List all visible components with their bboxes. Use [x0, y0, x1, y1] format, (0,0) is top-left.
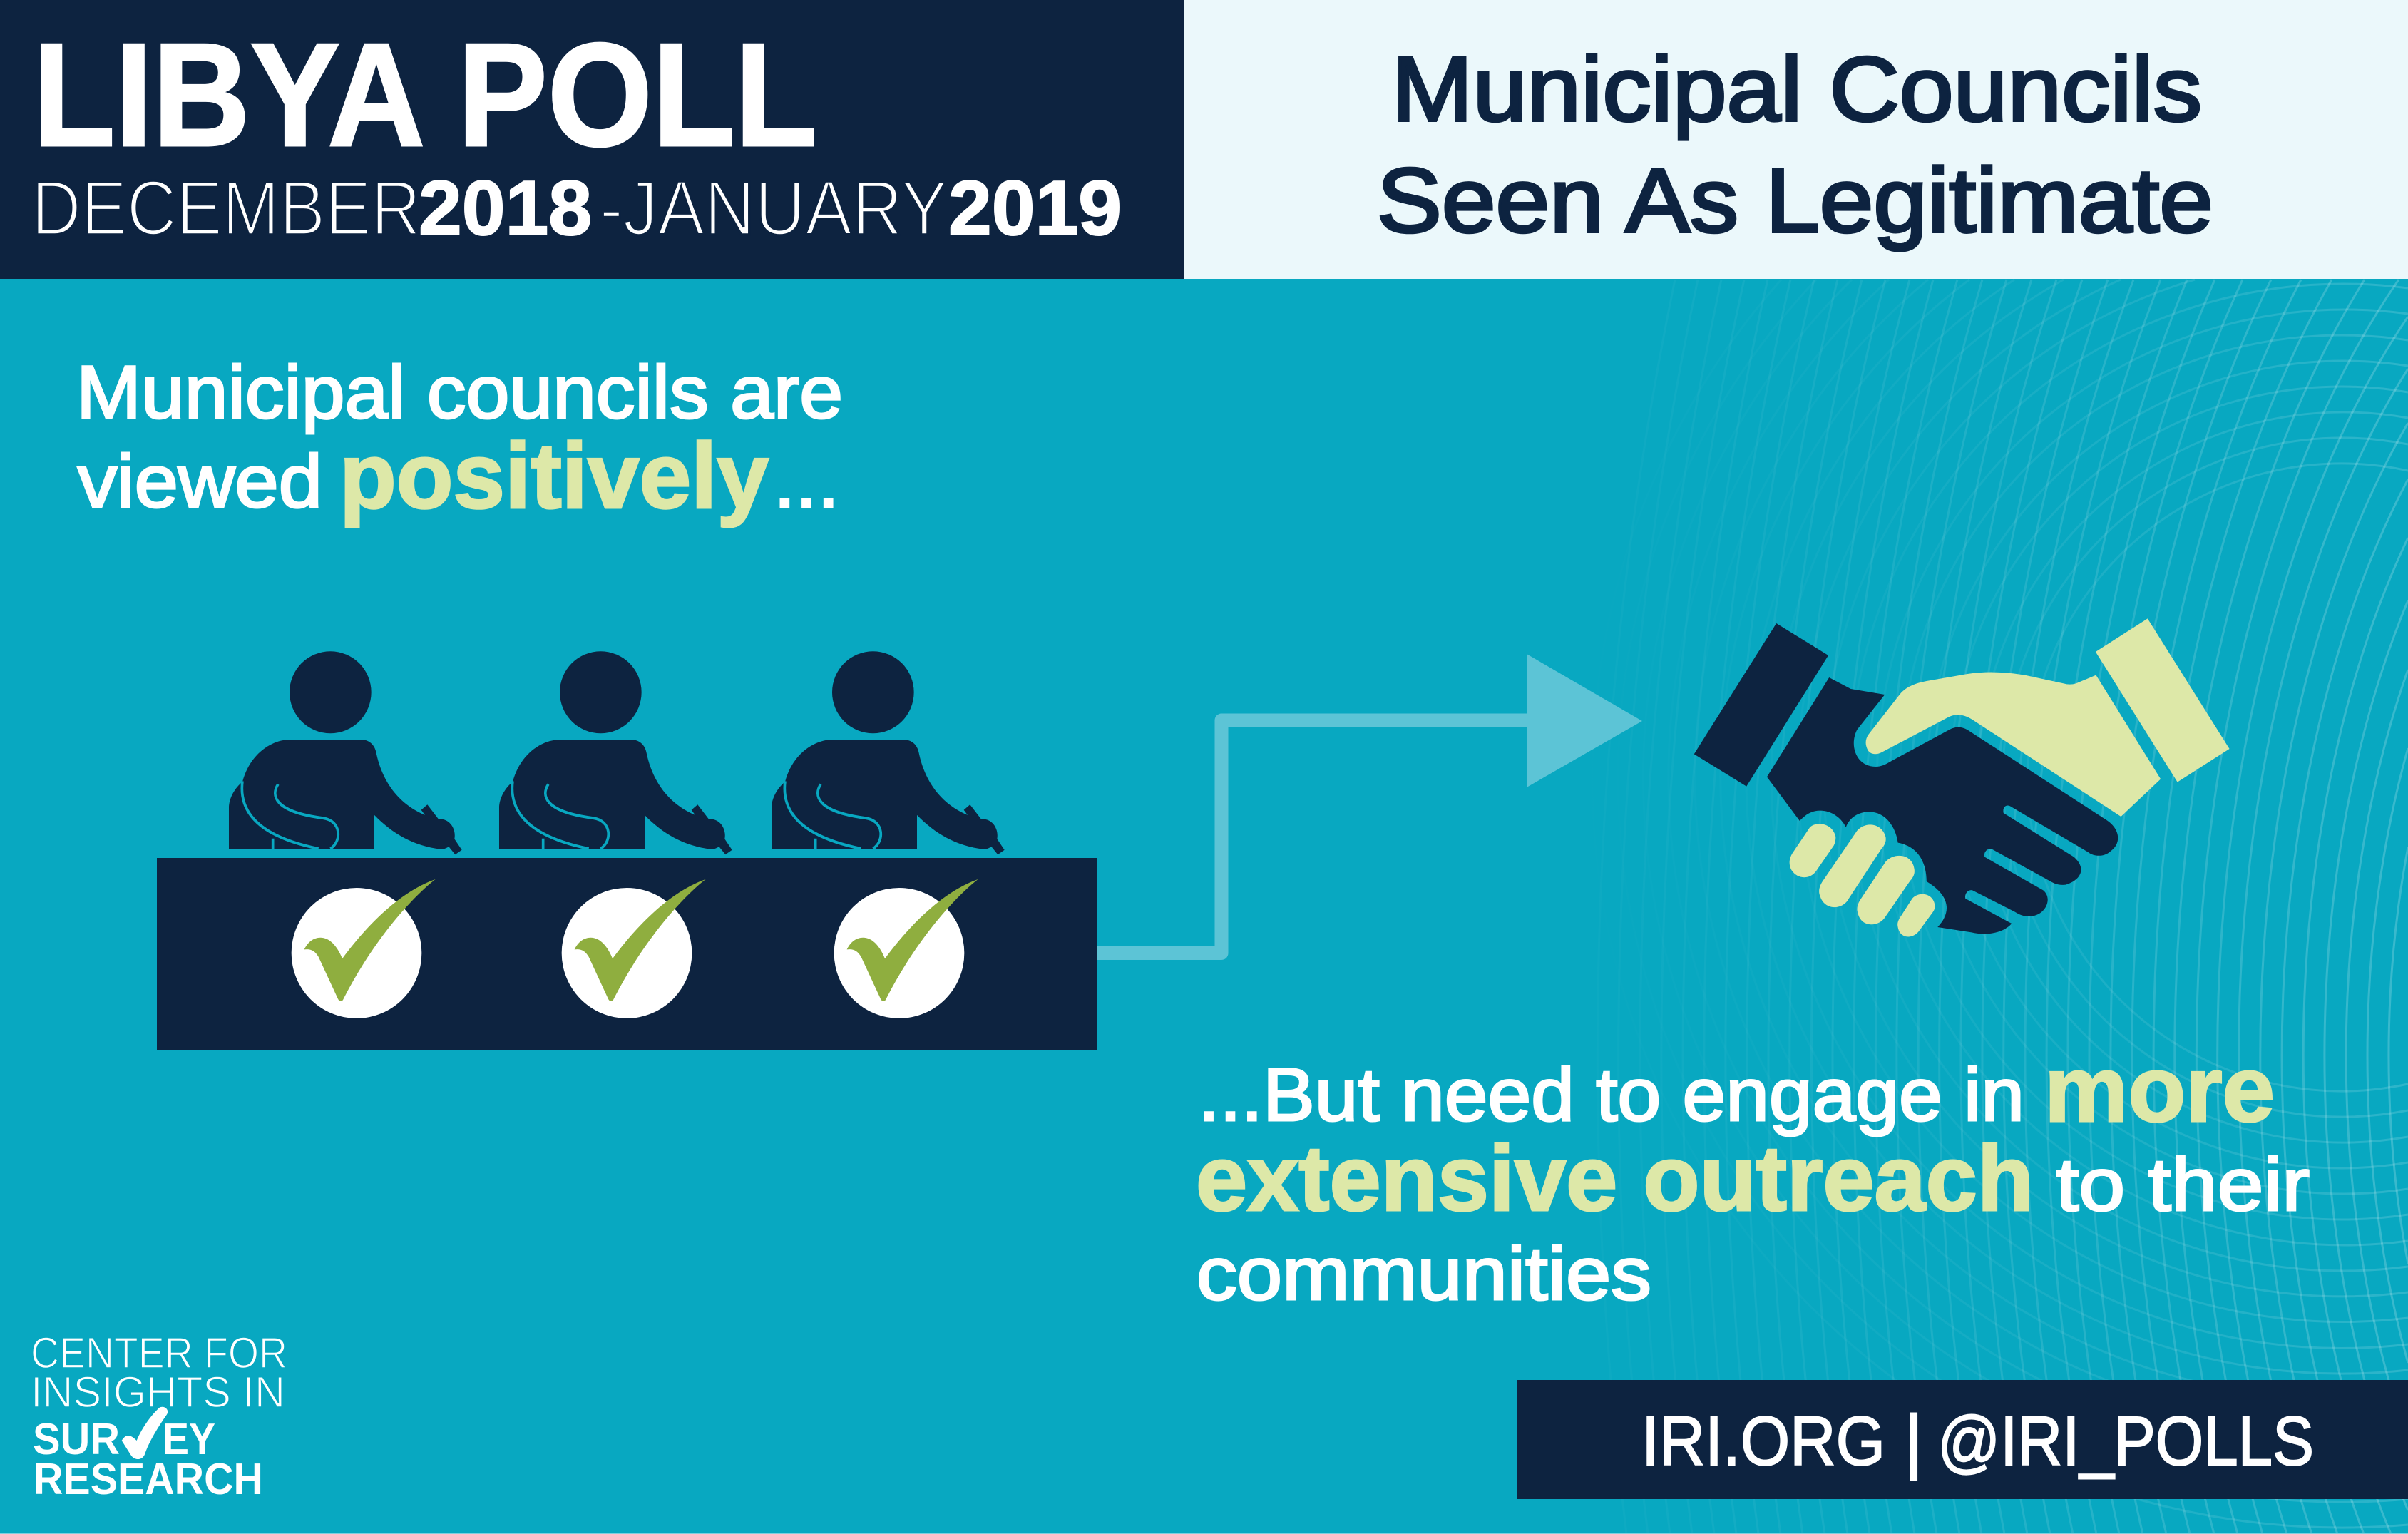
logo: Center for Insights in Survey Research: RESEARCH: [34, 1455, 263, 1504]
footer bar: web and social handle: [1517, 1380, 2408, 1499]
text block: councils viewed positively: Municipal councils are: [76, 351, 843, 434]
council member 3: [772, 651, 1005, 854]
logo: Center for Insights in Survey Research: INSIGHTS IN: [31, 1368, 285, 1416]
text block: need for more extensive outreach: to their: [2056, 1143, 2310, 1227]
table: [157, 858, 1097, 1050]
poll dates: 2019: [948, 165, 1122, 252]
check mark 1: [292, 879, 436, 1018]
council member 1: [229, 651, 462, 854]
check mark 2: [562, 879, 706, 1018]
logo: Center for Insights in Survey Research: EY: [163, 1415, 215, 1464]
footer bar: web and social handle: @IRI_POLLS: [1937, 1402, 2314, 1480]
text block: need for more extensive outreach: more: [2044, 1037, 2275, 1141]
text block: need for more extensive outreach: communities: [1197, 1232, 1651, 1316]
text block: councils viewed positively: ...: [774, 440, 839, 523]
poll dates: -JANUARY: [600, 165, 948, 252]
text block: need for more extensive outreach: [1196, 1037, 2310, 1316]
heading: Municipal Councils Seen As Legitimate: Municipal Councils: [1392, 39, 2202, 140]
logo: Center for Insights in Survey Research: [31, 1329, 287, 1504]
poll dates: DECEMBER: [31, 165, 421, 252]
footer bar: web and social handle: |: [1905, 1401, 1923, 1481]
text block: need for more extensive outreach: extensive outreach: [1196, 1126, 2034, 1230]
poll dates: [31, 165, 1122, 252]
check mark 3: [834, 879, 978, 1018]
arrow: from council to handshake: [1097, 654, 1642, 953]
header panel: topic: [1184, 0, 2408, 279]
heading: LIBYA POLL: LIBYA POLL: [33, 13, 817, 177]
text block: councils viewed positively: viewed: [78, 440, 322, 523]
footer bar: web and social handle: IRI.ORG: [1641, 1402, 1885, 1480]
icon: council members seated at table: [157, 651, 1097, 1050]
heading: Municipal Councils Seen As Legitimate: Seen As Legitimate: [1377, 150, 2213, 252]
text block: councils viewed positively: [76, 351, 843, 528]
icon: handshake: [1694, 618, 2230, 936]
council member 2: [499, 651, 732, 854]
heading: Municipal Councils Seen As Legitimate: [1377, 39, 2213, 252]
logo: Center for Insights in Survey Research: CENTER FOR: [31, 1329, 287, 1377]
logo: Center for Insights in Survey Research: SUR: [33, 1415, 120, 1464]
text block: need for more extensive outreach: ...But need to engage in: [1198, 1053, 2024, 1137]
header panel: poll title: [0, 0, 1184, 279]
poll dates: 2018: [419, 165, 592, 252]
text block: councils viewed positively: positively: [339, 424, 769, 528]
